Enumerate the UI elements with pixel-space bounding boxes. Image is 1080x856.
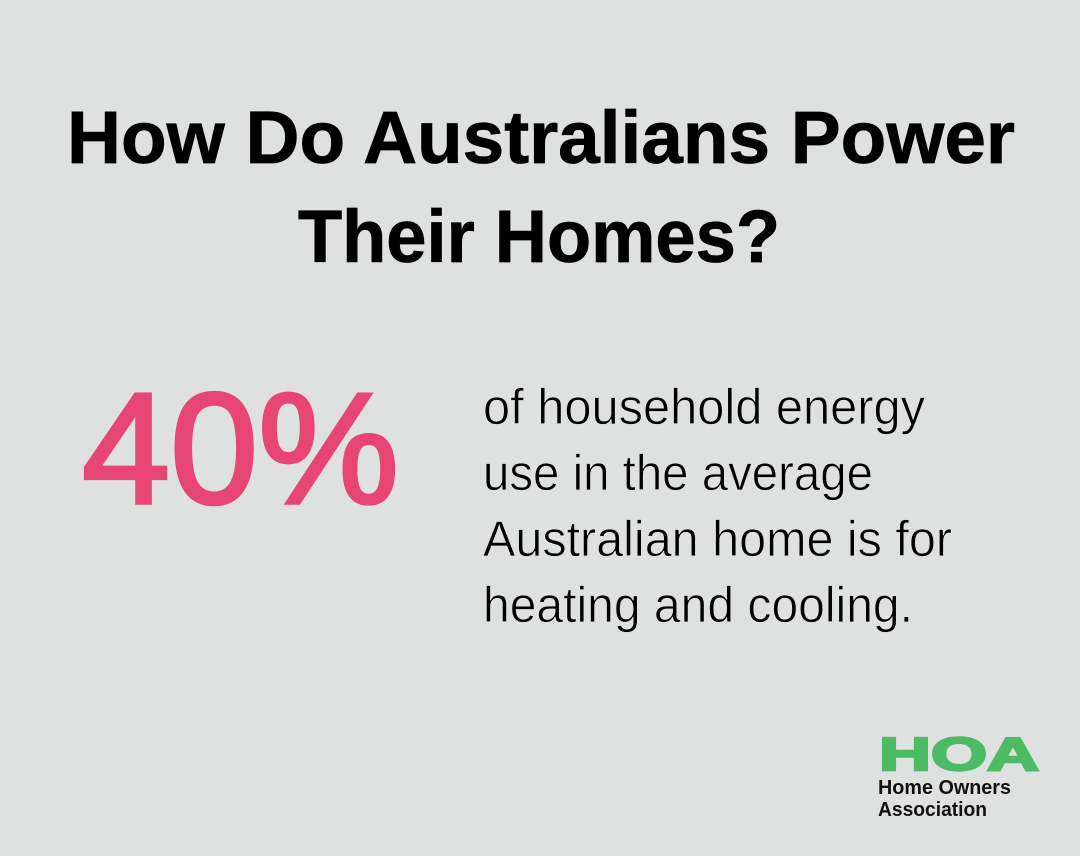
big statistic: 40%: 40% (82, 361, 399, 537)
description text: heating and cooling. (483, 577, 913, 633)
description text: use in the average (483, 445, 873, 501)
description text: Australian home is for (483, 511, 952, 567)
description text: of household energy (483, 379, 925, 435)
title (67, 96, 1015, 278)
title: How Do Australians Power (67, 96, 1015, 179)
logo: Home Owners Association: Home Owners (878, 777, 1011, 799)
logo: Home Owners Association: Association (878, 799, 987, 821)
logo: Home Owners Association (878, 728, 1039, 821)
description text (483, 379, 952, 633)
title: Their Homes? (298, 195, 780, 278)
logo: Home Owners Association: HOA (879, 728, 1039, 780)
